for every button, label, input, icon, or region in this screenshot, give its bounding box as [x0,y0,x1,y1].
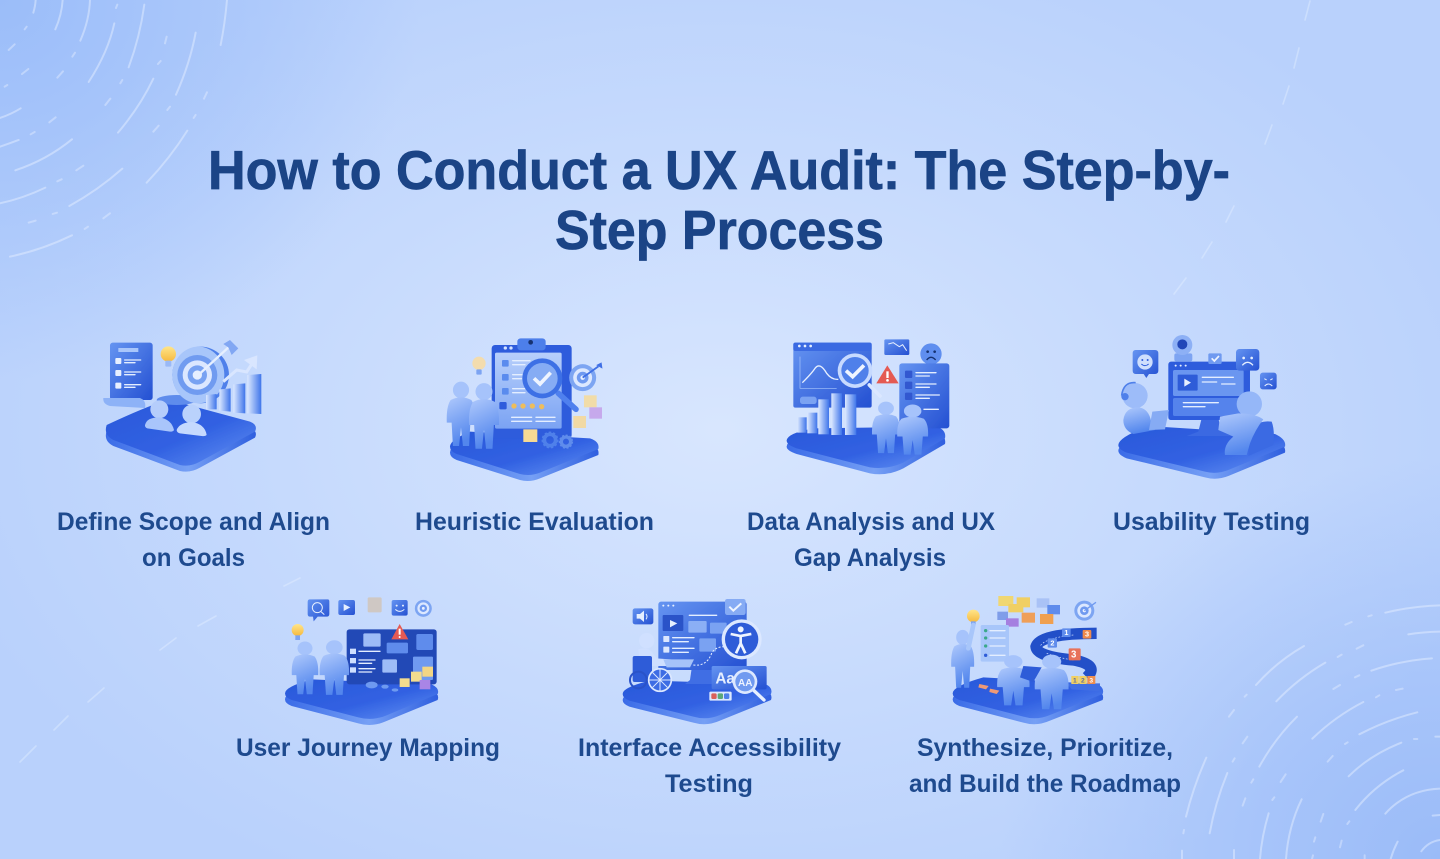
play tile [338,600,355,615]
light bulb [967,610,980,625]
check tile [1208,353,1222,364]
icon: data analysis and ux gap analysis [787,339,949,474]
search bubble [308,599,329,621]
numbered blocks: 2 [1081,677,1085,684]
numbered blocks [1067,676,1100,691]
magnifier with check [522,358,576,409]
small trend panel [884,339,909,355]
people [447,382,499,449]
tester with headset [1121,383,1169,434]
sticky notes [523,395,602,442]
decorative dashes: diagonal sweep [20,1,1310,762]
target with arrow [157,340,238,405]
label: synthesize, prioritize and build the roadmap [909,734,1181,798]
check tile [725,599,746,615]
sad face bubble [920,343,942,365]
decorative arcs: top left [0,0,227,257]
checklist [981,625,1009,662]
milestones: 3 [1071,650,1077,661]
warning triangle [391,624,408,639]
icon: synthesize, prioritize and build the roadmap [951,596,1103,724]
gears [542,432,572,448]
label: interface accessibility testing: Testing [665,770,753,798]
title: How to Conduct a UX Audit: The Step-by- [208,139,1230,201]
sticky notes [400,667,433,689]
floor notes [978,684,999,694]
icon: define scope and align on goals [103,340,261,472]
icon: usability testing [1118,335,1285,479]
two people busts [145,400,207,436]
text scale panel: Aa [715,670,735,687]
bar chart [797,393,856,435]
label: define scope and align on goals [57,508,330,572]
warning triangle [876,365,899,383]
text scale panel: AA [738,678,752,689]
label: define scope and align on goals: Define Scope and Align [57,508,330,536]
analytics panel [793,343,872,408]
milestones [1048,628,1091,661]
small angry bubble [1260,373,1277,389]
speaker bubble [633,608,653,624]
title: Step Process [555,199,884,261]
light bulb [472,357,486,375]
accessibility badge [722,619,762,659]
label: usability testing: Usability Testing [1113,508,1310,536]
label: data analysis and ux gap analysis [747,508,995,572]
checklist panel [899,363,949,428]
milestones: 2 [1050,638,1054,647]
target [1074,601,1096,621]
label: interface accessibility testing: Interface Accessibility [578,734,841,762]
title [208,139,1230,261]
webcam [1172,335,1192,361]
target [569,362,602,391]
decorative arcs: bottom right [1182,605,1440,859]
label: define scope and align on goals: on Goals [142,544,245,572]
icon: interface accessibility testing [623,599,771,724]
rating stars [511,403,544,409]
platform [106,400,256,472]
milestones: 1 [1064,628,1068,637]
magnifier with check [838,353,880,396]
label: user journey mapping: User Journey Mapping [236,734,500,762]
bar chart with arrow [206,355,261,414]
sticky note cluster [997,596,1060,627]
smile bubble [1133,350,1158,378]
numbered blocks: 1 [1073,677,1077,684]
floor blocks [366,682,398,692]
target [415,600,432,617]
milestones: 3 [1085,630,1089,639]
people [951,625,1069,709]
people [872,402,928,455]
platform [450,432,599,481]
sad bubble [1236,349,1259,371]
document scroll [103,343,153,408]
label: synthesize, prioritize and build the roadmap: Synthesize, Prioritize, [917,734,1173,762]
wheelchair user [630,633,694,691]
platform [285,679,438,725]
platform [953,677,1103,724]
handheld tablet [1020,666,1042,682]
label: interface accessibility testing [578,734,841,798]
icon: user journey mapping [285,597,438,725]
monitor [1168,362,1250,436]
note tile [368,597,382,612]
numbered blocks: 3 [1089,677,1093,684]
journey board [347,629,437,684]
platform [623,681,771,724]
people [292,640,349,695]
colour swatch [709,692,732,701]
label: data analysis and ux gap analysis: Gap Analysis [794,544,946,572]
platform [787,427,945,474]
light bulb [292,624,304,640]
clipboard [492,338,572,438]
smile tile [392,600,408,616]
light bulb [161,346,176,367]
monitor [658,602,747,684]
icon: heuristic evaluation [447,338,602,481]
platform [1118,426,1285,479]
label: heuristic evaluation: Heuristic Evaluation [415,508,654,536]
label: synthesize, prioritize and build the roadmap: and Build the Roadmap [909,770,1181,798]
label: data analysis and ux gap analysis: Data Analysis and UX [747,508,995,536]
text scale panel [712,666,767,700]
roadmap road [1036,633,1097,677]
user in chair [1218,391,1274,456]
